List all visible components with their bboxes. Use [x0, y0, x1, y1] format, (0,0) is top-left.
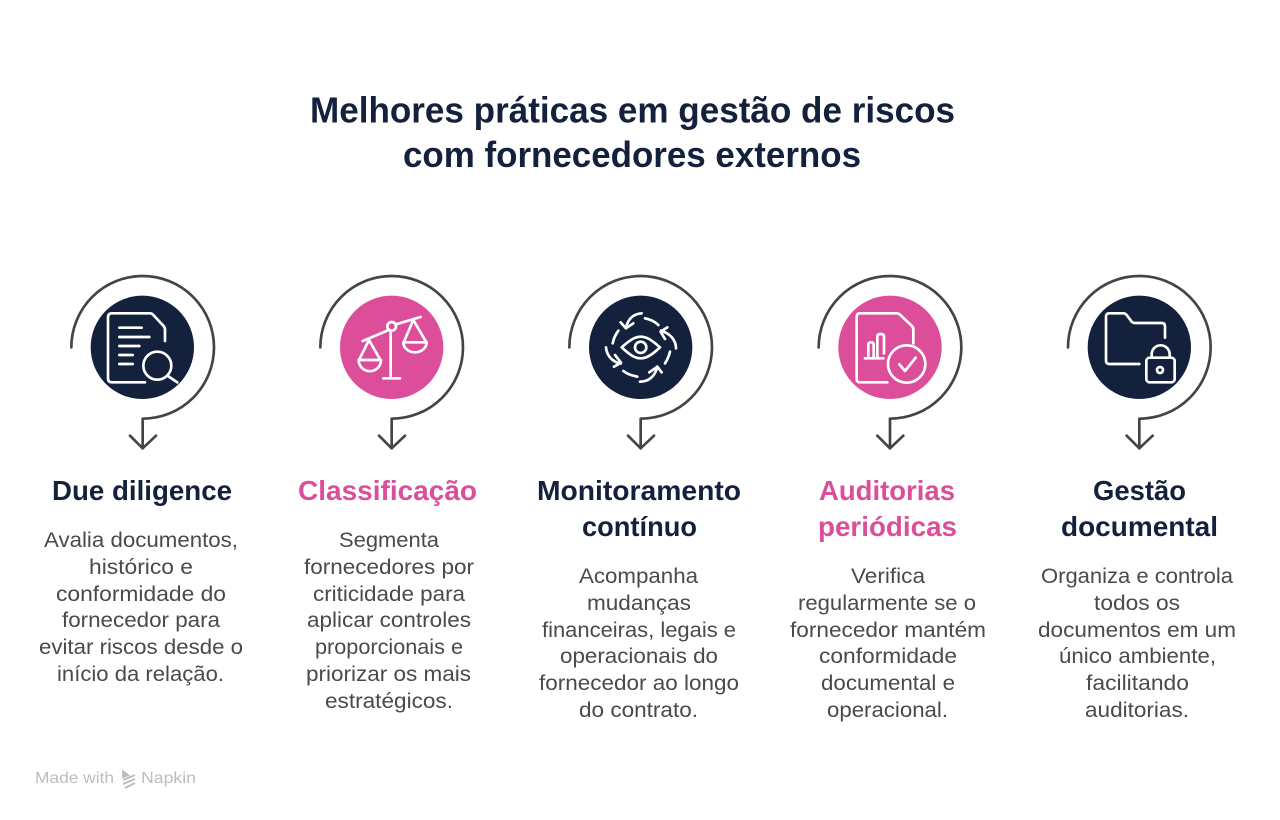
- text: gestão documental description: único ambiente,: [1059, 644, 1216, 668]
- panel: auditorias periódicas: [790, 276, 986, 722]
- text: due diligence description: fornecedor para: [62, 608, 220, 632]
- icon: report with check mark in ring with down arrow: [819, 276, 961, 448]
- heading: auditorias periódicas: [818, 475, 957, 542]
- text: gestão documental description: facilitando: [1086, 671, 1189, 695]
- text: monitoramento description: financeiras, legais e: [542, 618, 736, 642]
- heading: gestão documental: documental: [1061, 511, 1218, 542]
- watermark: made with napkin: Napkin: [141, 770, 196, 787]
- watermark: made with napkin: [35, 770, 196, 788]
- title: [310, 90, 955, 175]
- text: monitoramento description: [539, 564, 739, 722]
- icon: folder with padlock in ring with down arrow: [1068, 276, 1211, 448]
- panel: classificação: [298, 276, 477, 713]
- text: due diligence description: início da relação.: [57, 662, 224, 686]
- text: monitoramento description: mudanças: [587, 591, 691, 615]
- heading: monitoramento contínuo: contínuo: [582, 511, 697, 542]
- text: monitoramento description: do contrato.: [579, 698, 698, 722]
- panel: monitoramento contínuo: [537, 276, 741, 722]
- text: classificação description: priorizar os mais: [306, 662, 471, 686]
- icon: napkin logo: [123, 772, 135, 788]
- panel: due diligence: [39, 276, 243, 686]
- text: classificação description: estratégicos.: [325, 689, 453, 713]
- text: auditorias description: [790, 564, 986, 722]
- title: com fornecedores externos: [403, 134, 861, 175]
- text: due diligence description: evitar riscos desde o: [39, 635, 243, 659]
- text: classificação description: fornecedores por: [304, 555, 474, 579]
- text: classificação description: proporcionais e: [315, 635, 463, 659]
- text: auditorias description: fornecedor mantém: [790, 618, 986, 642]
- text: monitoramento description: operacionais do: [560, 644, 718, 668]
- heading: auditorias periódicas: periódicas: [818, 511, 957, 542]
- text: classificação description: [304, 528, 474, 713]
- heading: gestão documental: Gestão: [1093, 475, 1186, 506]
- text: gestão documental description: auditorias.: [1085, 698, 1189, 722]
- heading: auditorias periódicas: Auditorias: [819, 475, 955, 506]
- icon: document search in ring with down arrow: [71, 276, 214, 448]
- icon: eye with cycle arrows in ring with down arrow: [569, 276, 712, 448]
- text: auditorias description: documental e: [821, 671, 955, 695]
- heading: gestão documental: [1061, 475, 1218, 542]
- text: classificação description: aplicar controles: [307, 608, 471, 632]
- text: due diligence description: histórico e: [89, 555, 193, 579]
- watermark: made with napkin: Made with: [35, 770, 114, 787]
- text: monitoramento description: Acompanha: [579, 564, 698, 588]
- text: due diligence description: [39, 528, 243, 686]
- title: Melhores práticas em gestão de riscos: [310, 90, 955, 130]
- heading: monitoramento contínuo: [537, 475, 741, 542]
- text: due diligence description: Avalia documentos,: [44, 528, 238, 552]
- text: monitoramento description: fornecedor ao longo: [539, 671, 739, 695]
- icon: balance scale in ring with down arrow: [320, 276, 463, 448]
- text: gestão documental description: documentos em um: [1038, 618, 1236, 642]
- text: auditorias description: conformidade: [819, 644, 957, 668]
- text: due diligence description: conformidade do: [56, 582, 226, 606]
- heading: monitoramento contínuo: Monitoramento: [537, 475, 741, 506]
- text: auditorias description: regularmente se o: [798, 591, 976, 615]
- heading: classificação: Classificação: [298, 475, 477, 506]
- heading: due diligence: Due diligence: [52, 475, 232, 506]
- text: gestão documental description: [1038, 564, 1236, 722]
- text: classificação description: criticidade para: [313, 582, 465, 606]
- panel: gestão documental: [1038, 276, 1236, 722]
- text: auditorias description: Verifica: [851, 564, 925, 588]
- text: classificação description: Segmenta: [339, 528, 439, 552]
- text: gestão documental description: Organiza e controla: [1041, 564, 1233, 588]
- text: gestão documental description: todos os: [1094, 591, 1180, 615]
- text: auditorias description: operacional.: [827, 698, 948, 722]
